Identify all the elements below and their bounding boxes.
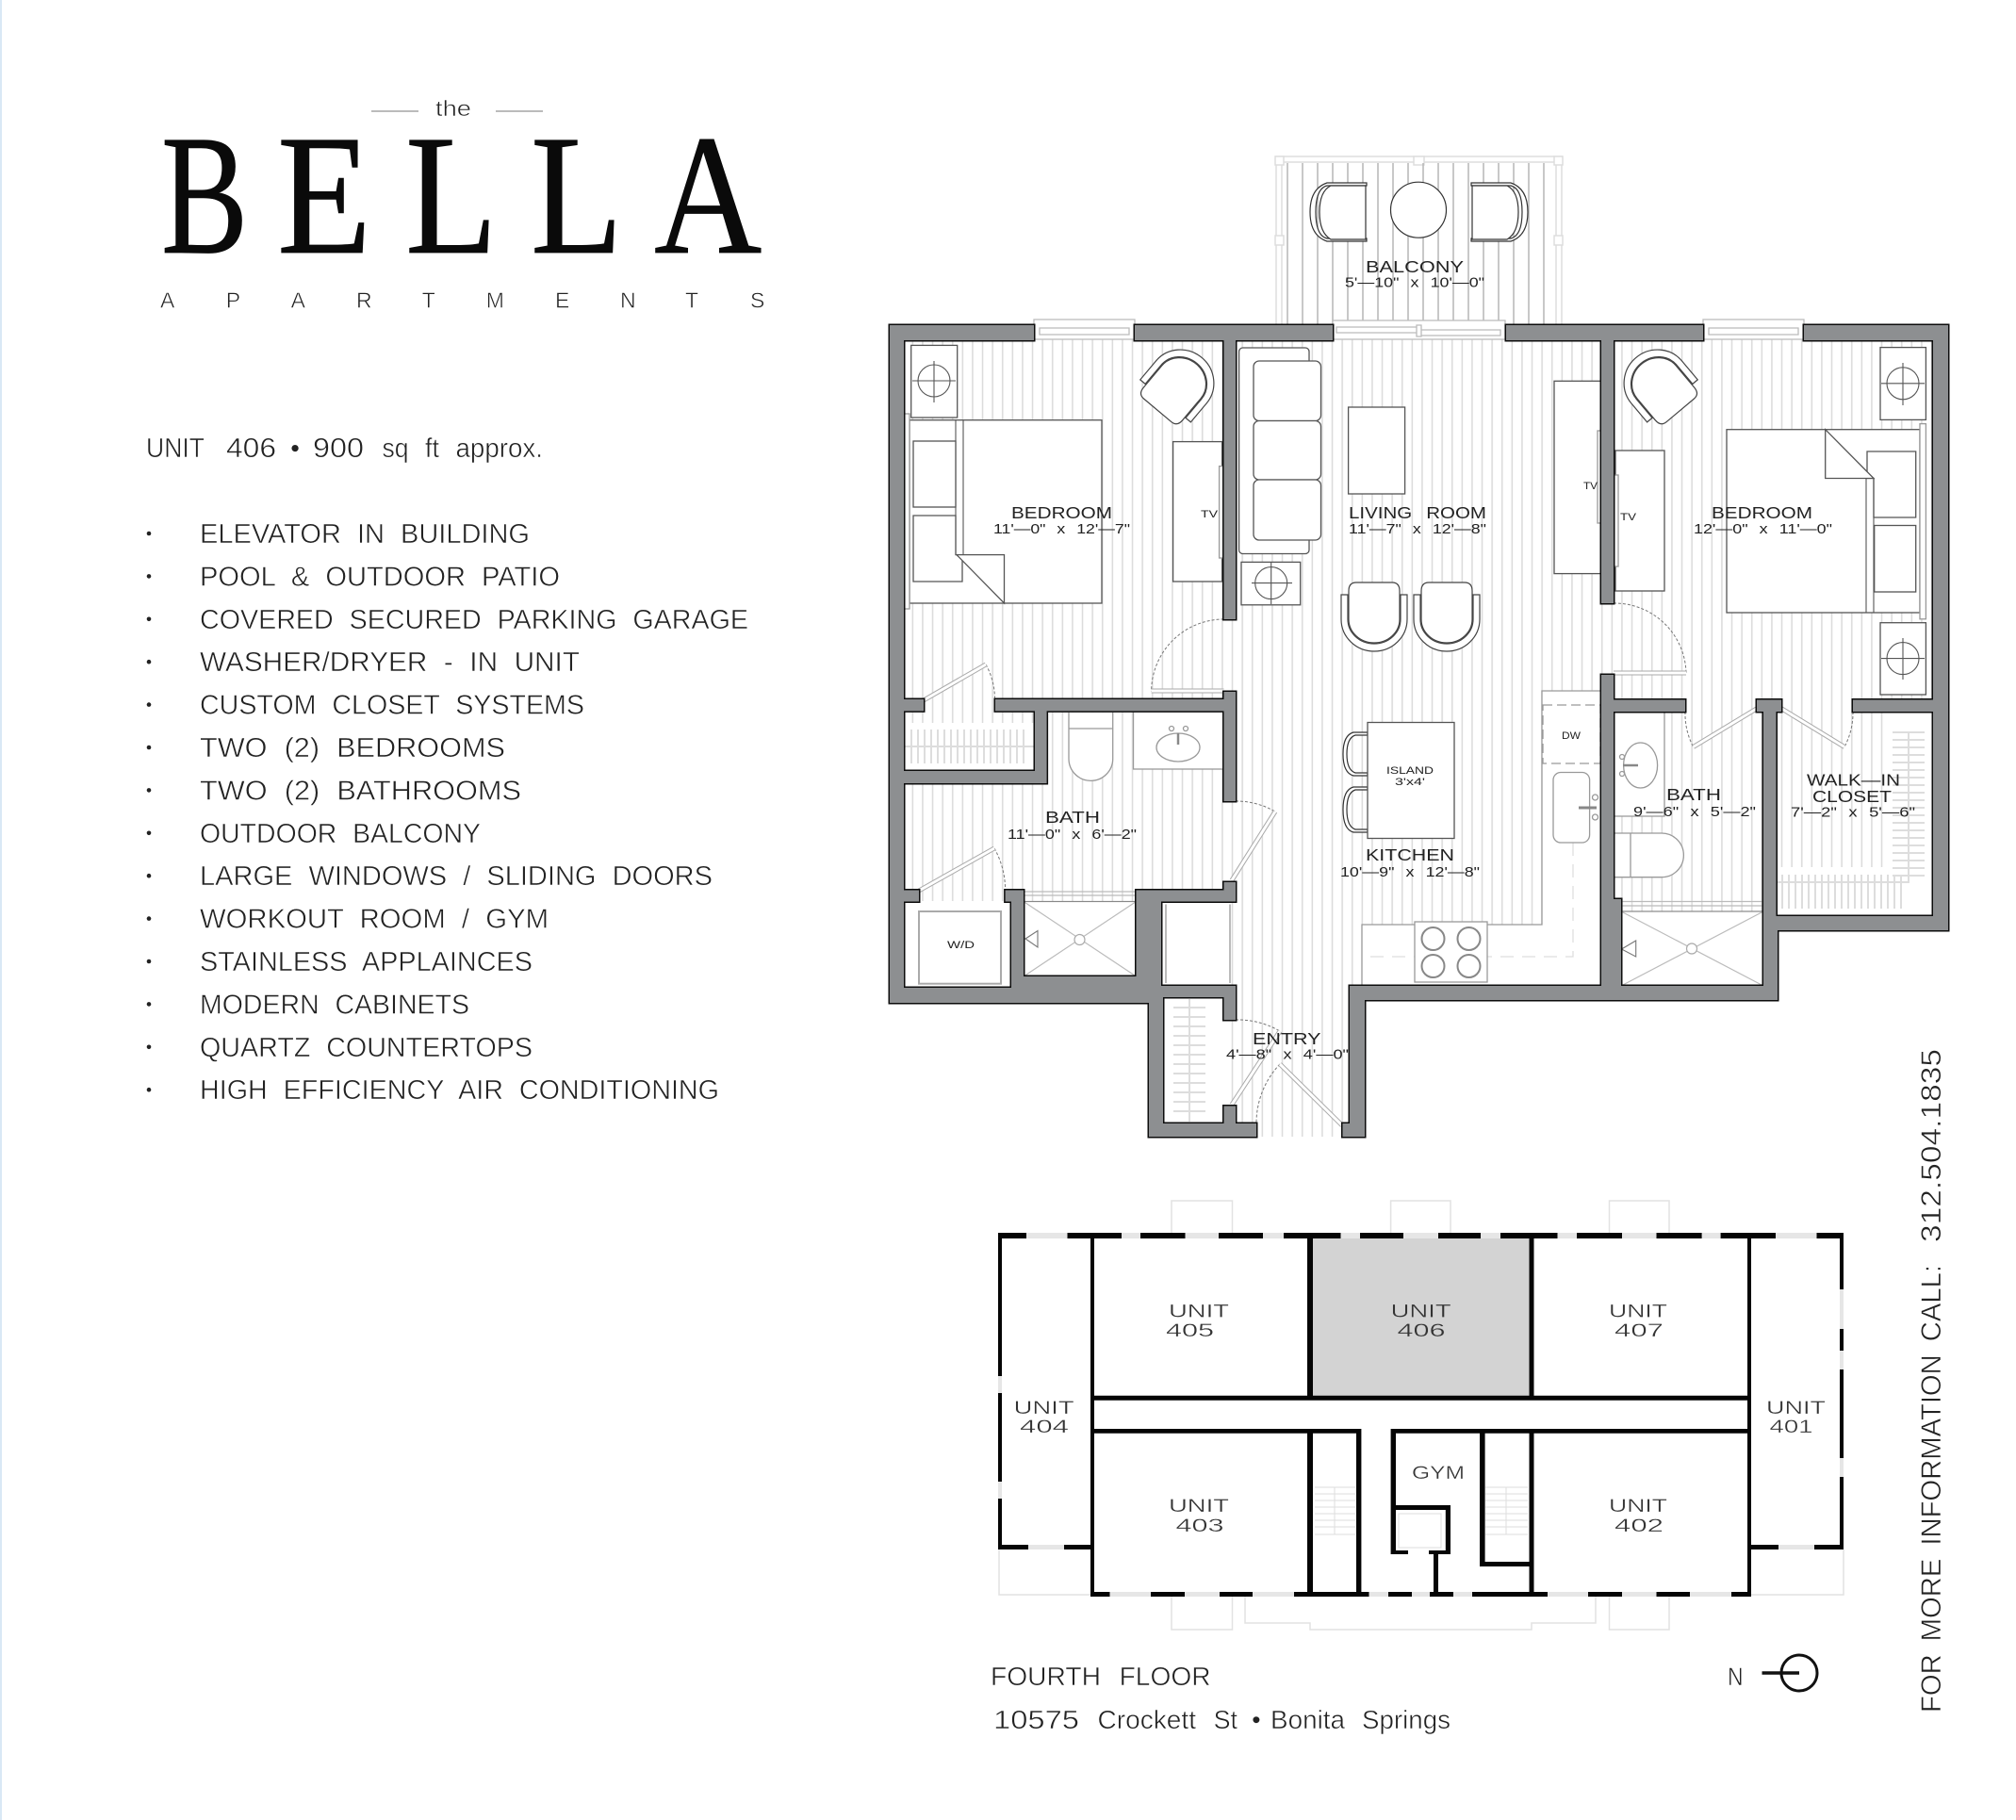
floor name: FOURTH <box>991 1662 1101 1691</box>
address <box>993 1705 1451 1734</box>
balcony decking <box>1287 163 1544 324</box>
walls <box>890 325 1948 1137</box>
kitchen counter <box>1362 691 1601 986</box>
label: unit 404: 404 <box>1020 1418 1070 1437</box>
kitchen island with stools: ISLAND <box>1386 765 1434 777</box>
label: unit 401: 401 <box>1770 1418 1813 1437</box>
amenity items: CUSTOM CLOSET SYSTEMS <box>200 691 584 721</box>
panel: left bath fixtures <box>919 712 1230 984</box>
amenity items: MODERN CABINETS <box>200 990 469 1020</box>
vanity and sink <box>1614 712 1664 816</box>
door swings <box>919 603 1853 1125</box>
amenity items: STAINLESS APPLAINCES <box>200 947 533 977</box>
bed <box>1727 424 1926 619</box>
logo word: BELLA: B <box>161 100 248 289</box>
label: entry: 4'—8" x 4'—0" <box>1226 1046 1349 1063</box>
label: walk-in closet: CLOSET <box>1812 787 1892 806</box>
label: unit 406: 406 <box>1397 1321 1446 1341</box>
address: Bonita <box>1270 1705 1345 1734</box>
panel: right bath fixtures <box>1614 712 1763 986</box>
label: unit 404: UNIT <box>1014 1399 1074 1418</box>
living room chairs <box>1341 582 1480 651</box>
contact phone text: 312.504.1835 <box>1916 1049 1947 1242</box>
icon: stools <box>1343 732 1368 832</box>
unit 406 highlight <box>1313 1238 1529 1396</box>
label: unit 406: UNIT <box>1391 1303 1451 1322</box>
label: unit 403: UNIT <box>1169 1497 1230 1517</box>
address: 10575 <box>993 1705 1079 1734</box>
icon: north arrow: N <box>1728 1663 1744 1691</box>
dishwasher: DW <box>1562 730 1582 742</box>
white closet and kitchen zones <box>904 712 1933 1123</box>
amenity items <box>200 519 748 1106</box>
label: unit 401: UNIT <box>1766 1399 1827 1418</box>
amenity items: HIGH EFFICIENCY AIR CONDITIONING <box>200 1075 719 1106</box>
faint stairs <box>1315 1487 1528 1548</box>
label: walk-in closet <box>1791 771 1915 821</box>
panel: fourth floor key plan <box>998 1201 1844 1630</box>
label: unit 407 <box>1609 1303 1668 1341</box>
icon: north arrow <box>1728 1655 1817 1691</box>
amenity items: WASHER/DRYER - IN UNIT <box>200 648 580 678</box>
label: right bath: 9'—6" x 5'—2" <box>1633 804 1756 820</box>
shower <box>1621 901 1763 986</box>
counter dashed edge <box>1362 843 1573 957</box>
logo: the Bella Apartments <box>160 96 764 313</box>
icon: balcony chair right <box>1471 183 1528 241</box>
label: unit 404 <box>1014 1399 1074 1437</box>
label: unit 403: 403 <box>1176 1517 1223 1536</box>
living room TV console <box>1554 381 1601 574</box>
label: right bath <box>1633 785 1756 820</box>
icon: toilet <box>1069 713 1113 780</box>
logo word: BELLA: E <box>277 101 371 290</box>
label: unit 402: UNIT <box>1609 1497 1668 1517</box>
label: unit 402: 402 <box>1614 1517 1664 1536</box>
linen closet <box>1166 905 1230 983</box>
label: walk-in closet: WALK—IN <box>1807 771 1900 790</box>
panel: unit floor plan <box>890 320 1948 1137</box>
label: walk-in closet: 7'—2" x 5'—6" <box>1791 805 1915 821</box>
label: entry <box>1226 1029 1349 1063</box>
unit heading: approx. <box>456 434 543 464</box>
faint balconies <box>999 1201 1844 1630</box>
vanity and sink <box>1133 712 1223 769</box>
label: unit 402 <box>1609 1497 1668 1536</box>
kitchen island with stools: 3'x4' <box>1395 777 1425 788</box>
closet clothing racks <box>905 731 1909 1122</box>
label: gym: GYM <box>1412 1464 1465 1484</box>
balcony label: 5'—10" x 10'—0" <box>1345 275 1484 290</box>
panel: balcony <box>1275 156 1563 325</box>
floor and address text <box>991 1662 1451 1734</box>
label: left bath <box>1008 808 1137 843</box>
floor name <box>991 1662 1211 1691</box>
label: unit 405: UNIT <box>1169 1303 1230 1322</box>
dishwasher <box>1543 705 1600 763</box>
label: unit 405 <box>1166 1303 1230 1341</box>
label: left bedroom: 11'—0" x 12'—7" <box>993 521 1130 537</box>
floor stripes <box>890 325 1948 1137</box>
label: kitchen: KITCHEN <box>1366 845 1454 864</box>
unit heading <box>146 434 543 464</box>
amenity items: QUARTZ COUNTERTOPS <box>200 1033 533 1063</box>
label: living room <box>1349 503 1486 537</box>
TV console: TV <box>1201 509 1219 520</box>
panel: left bedroom furniture <box>904 336 1227 609</box>
contact phone text: FOR MORE INFORMATION CALL: <box>1916 1265 1947 1713</box>
label: living room: LIVING ROOM <box>1349 503 1486 522</box>
TV console <box>1614 451 1664 591</box>
unit heading: 900 <box>313 434 364 464</box>
shower <box>1024 892 1137 976</box>
armchair <box>1611 336 1706 432</box>
plan windows <box>998 1233 1844 1597</box>
kitchen island with stools <box>1343 722 1454 839</box>
label: right bedroom: BEDROOM <box>1712 503 1812 522</box>
unit heading: • <box>290 434 300 464</box>
amenities list <box>147 519 748 1106</box>
label: unit 407: UNIT <box>1609 1303 1668 1322</box>
amenity items: POOL & OUTDOOR PATIO <box>200 562 560 592</box>
logo word: BELLA <box>161 100 762 290</box>
coffee table <box>1349 407 1405 494</box>
nightstand <box>911 345 958 418</box>
unit heading: ft <box>425 434 439 464</box>
washer dryer <box>919 911 1001 984</box>
label: unit 401 <box>1766 1399 1827 1437</box>
logo word: APARTMENTS: APARTMENTS <box>160 288 764 313</box>
amenity items: TWO (2) BATHROOMS <box>200 776 521 806</box>
amenity items: WORKOUT ROOM / GYM <box>200 905 549 935</box>
unit heading: 406 <box>226 434 276 464</box>
balcony railing <box>1275 156 1563 325</box>
address: St <box>1214 1705 1237 1734</box>
label: right bedroom <box>1694 503 1832 537</box>
panel: right bedroom furniture <box>1611 336 1926 695</box>
unit heading: sq <box>383 434 409 464</box>
label: kitchen <box>1340 845 1480 880</box>
balcony label: BALCONY <box>1366 257 1464 276</box>
icon: toilet <box>1614 833 1683 877</box>
label: right bedroom: 12'—0" x 11'—0" <box>1694 521 1832 537</box>
TV console: TV <box>1620 512 1637 523</box>
bed <box>904 414 1102 609</box>
icon: balcony chair left <box>1310 183 1367 241</box>
label: left bath: 11'—0" x 6'—2" <box>1008 827 1137 843</box>
icon: stove <box>1415 922 1487 982</box>
amenity items: ELEVATOR IN BUILDING <box>200 519 530 549</box>
unit labels <box>1014 1303 1827 1536</box>
room labels <box>993 503 1915 1063</box>
logo word: BELLA: L <box>531 101 623 290</box>
logo word: BELLA: L <box>405 101 498 290</box>
label: unit 406 <box>1391 1303 1451 1341</box>
label: unit 403 <box>1169 1497 1230 1536</box>
plan walls <box>998 1233 1844 1597</box>
address: • <box>1252 1705 1261 1734</box>
amenity items: TWO (2) BEDROOMS <box>200 733 505 763</box>
label: left bedroom: BEDROOM <box>1011 503 1112 522</box>
logo word: BELLA: A <box>654 100 762 289</box>
living room TV console: TV <box>1583 481 1598 492</box>
amenity items: COVERED SECURED PARKING GARAGE <box>200 605 748 635</box>
windows and sliding door <box>1034 320 1804 339</box>
amenity items: OUTDOOR BALCONY <box>200 819 481 849</box>
contact phone text <box>1916 1049 1947 1713</box>
unit heading: UNIT <box>146 434 205 464</box>
floor name: FLOOR <box>1120 1662 1211 1691</box>
washer dryer: W/D <box>947 940 975 951</box>
logo word: the: the <box>435 96 471 121</box>
label: entry: ENTRY <box>1253 1029 1321 1048</box>
icon: kitchen sink <box>1553 773 1598 843</box>
address: Springs <box>1362 1705 1451 1734</box>
balcony label <box>1345 257 1484 290</box>
amenity items: LARGE WINDOWS / SLIDING DOORS <box>200 861 713 892</box>
label: right bath: BATH <box>1666 785 1721 804</box>
label: unit 405: 405 <box>1166 1321 1214 1341</box>
label: unit 407: 407 <box>1614 1321 1664 1341</box>
icon: balcony table <box>1391 182 1446 238</box>
label: living room: 11'—7" x 12'—8" <box>1349 521 1486 537</box>
TV console <box>1173 442 1223 582</box>
nightstand bottom <box>1880 623 1926 695</box>
label: left bedroom <box>993 503 1130 537</box>
label: left bath: BATH <box>1045 808 1100 827</box>
living room sofa <box>1239 348 1321 554</box>
address: Crockett <box>1097 1705 1196 1734</box>
nightstand top <box>1880 348 1926 419</box>
bullets <box>147 532 151 1091</box>
lamp table <box>1241 562 1301 605</box>
label: kitchen: 10'—9" x 12'—8" <box>1340 864 1480 880</box>
armchair <box>1132 336 1227 432</box>
